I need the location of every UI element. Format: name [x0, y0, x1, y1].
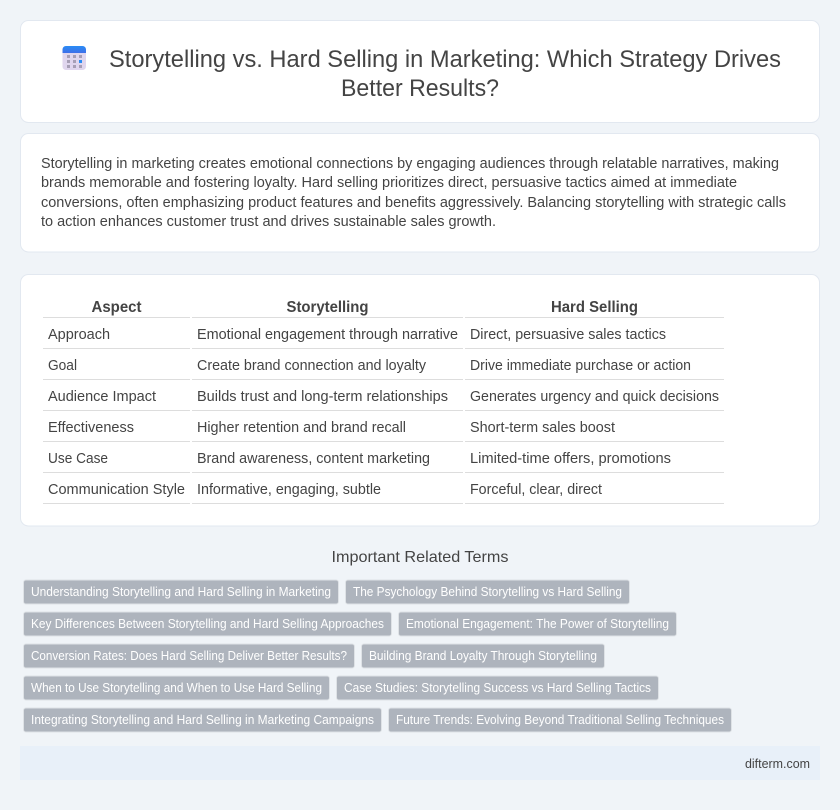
table row: communication style: [48, 482, 602, 498]
table row: effectiveness: Higher retention and brand recall: [197, 420, 406, 436]
tag: [24, 644, 354, 668]
text block: introduction paragraph: conversions, often emphasizing product features and benefits aggressively. Balancing storytelling with strategic calls: [41, 195, 786, 211]
table header row: Hard Selling: [551, 299, 638, 316]
tag: [388, 708, 732, 732]
table row: effectiveness: Effectiveness: [48, 420, 134, 436]
panel: header: [20, 20, 820, 122]
table row: audience impact: Generates urgency and quick decisions: [470, 389, 719, 405]
tag: Key Differences Between Storytelling and Hard Selling Approaches: [31, 617, 384, 631]
table row: use case: [48, 451, 671, 467]
table row: goal: Drive immediate purchase or action: [470, 358, 691, 374]
title: Better Results?: [341, 75, 499, 102]
table header row: [92, 299, 638, 316]
table row: audience impact: [48, 389, 719, 405]
table row: audience impact: Builds trust and long-term relationships: [197, 389, 448, 405]
tag: Emotional Engagement: The Power of Storytelling: [406, 617, 669, 631]
table header row: Aspect: [92, 299, 142, 316]
tag: Case Studies: Storytelling Success vs Hard Selling Tactics: [344, 681, 651, 695]
table row: approach: Approach: [48, 327, 110, 343]
tag: [398, 612, 676, 636]
table row: audience impact: Audience Impact: [48, 389, 156, 405]
tag: Understanding Storytelling and Hard Selling in Marketing: [31, 585, 331, 599]
table row: effectiveness: Short-term sales boost: [470, 420, 615, 436]
table row: approach: Direct, persuasive sales tactics: [470, 327, 666, 343]
tag: Building Brand Loyalty Through Storytelling: [369, 649, 597, 663]
related term tags: [24, 580, 732, 732]
table row: use case: Brand awareness, content marketing: [197, 451, 430, 467]
tag: [24, 708, 382, 732]
tag: [24, 676, 330, 700]
tag: When to Use Storytelling and When to Use Hard Selling: [31, 681, 322, 695]
heading: important related terms: Important Related Terms: [332, 549, 508, 566]
tag: Conversion Rates: Does Hard Selling Deliver Better Results?: [31, 649, 347, 663]
table row: goal: [48, 358, 691, 374]
panel: comparison table: [20, 274, 820, 526]
tag: [336, 676, 658, 700]
tag: [362, 644, 604, 668]
title: [109, 46, 781, 102]
table row lines: [43, 318, 724, 504]
table row: communication style: Informative, engaging, subtle: [197, 482, 381, 498]
tag: Future Trends: Evolving Beyond Traditional Selling Techniques: [396, 713, 724, 727]
table row: effectiveness: [48, 420, 615, 436]
table row: use case: Limited-time offers, promotions: [470, 451, 671, 467]
tag: The Psychology Behind Storytelling vs Hard Selling: [353, 585, 622, 599]
table row: communication style: Communication Style: [48, 482, 185, 498]
table header row: Storytelling: [286, 299, 368, 316]
footer: difterm.com: [745, 757, 810, 771]
text block: introduction paragraph: Storytelling in marketing creates emotional connections by engaging audiences through relatable narratives, making: [41, 156, 779, 172]
table row: approach: [48, 327, 666, 343]
tag: [24, 612, 392, 636]
table row: use case: Use Case: [48, 451, 108, 467]
text block: introduction paragraph: to action enhances customer trust and drives sustainable sales growth.: [41, 214, 496, 230]
tag: Integrating Storytelling and Hard Selling in Marketing Campaigns: [31, 713, 374, 727]
panel: introduction: [20, 134, 820, 252]
footer: [20, 746, 820, 780]
table row: communication style: Forceful, clear, direct: [470, 482, 602, 498]
tag: [24, 580, 338, 604]
title: Storytelling vs. Hard Selling in Marketing: Which Strategy Drives: [109, 46, 781, 73]
text block: introduction paragraph: brands memorable and fostering loyalty. Hard selling prioritizes direct, persuasive tactics aimed at immediate: [41, 175, 737, 191]
tag: [346, 580, 630, 604]
text block: introduction paragraph: [41, 156, 786, 230]
table row: approach: Emotional engagement through narrative: [197, 327, 458, 343]
table row: goal: Goal: [48, 358, 77, 374]
table row: goal: Create brand connection and loyalty: [197, 358, 427, 374]
icon: calendar: [62, 46, 86, 70]
